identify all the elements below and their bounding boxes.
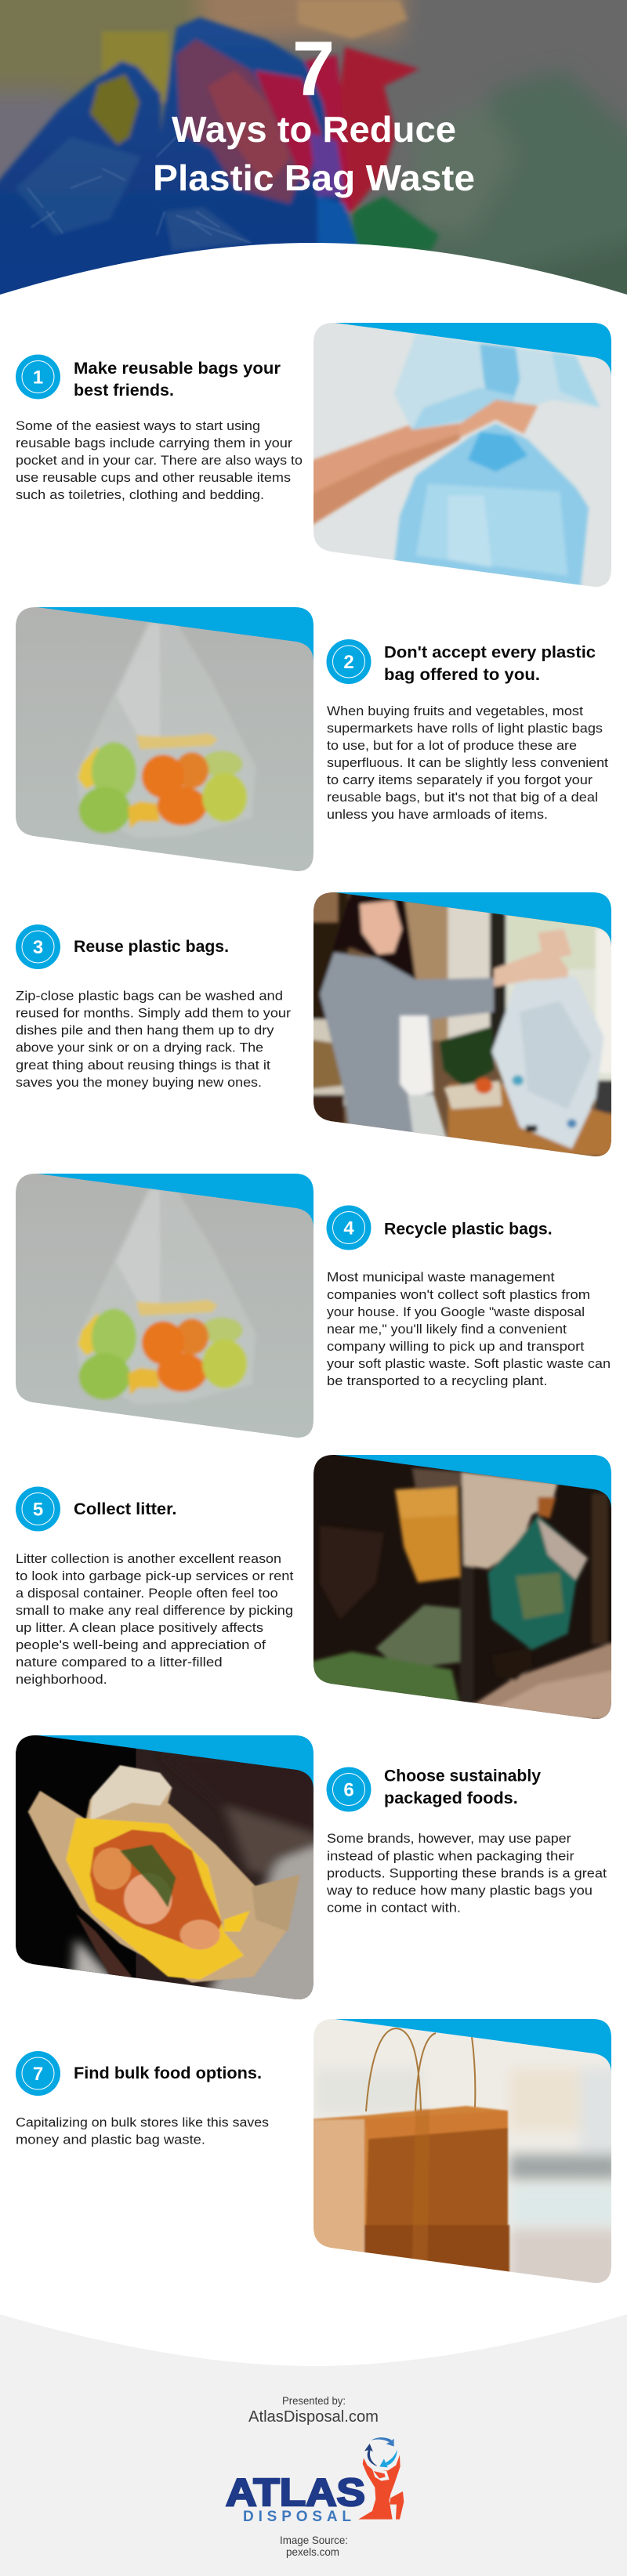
- image source: [280, 2534, 348, 2558]
- number badge 3: [16, 924, 60, 969]
- body text 5: [16, 1551, 294, 1687]
- blue corner accent: [334, 892, 611, 955]
- body text 5: people's well-being and appreciation of: [16, 1637, 266, 1652]
- body text 1: pocket and in your car. There are also ways to: [16, 453, 303, 468]
- bag folds: [27, 133, 251, 243]
- number badge 7: [16, 2051, 60, 2096]
- heading 6: [384, 1767, 541, 1807]
- wordmark: ATLAS: [226, 2472, 365, 2514]
- photo: fruit in clear bag: [16, 1174, 314, 1440]
- body text 2: to use, but for a lot of produce these are: [327, 738, 577, 753]
- body text 4: company willing to pick up and transport: [327, 1339, 585, 1354]
- blue corner accent: [36, 607, 314, 670]
- photo: hand holding blue bag: [308, 323, 611, 595]
- number badge 1: 1: [33, 367, 43, 389]
- heading 7: Find bulk food options.: [74, 2064, 262, 2082]
- body text 2: supermarkets have rolls of light plastic bags: [327, 721, 603, 736]
- heading 1: Make reusable bags your: [74, 360, 281, 378]
- body text 6: Some brands, however, may use paper: [327, 1831, 571, 1846]
- body text 5: nature compared to a litter-filled: [16, 1655, 223, 1670]
- heading 4: Recycle plastic bags.: [384, 1221, 553, 1239]
- blue corner accent: [334, 1455, 611, 1518]
- body text 6: come in contact with.: [327, 1900, 461, 1915]
- title: Plastic Bag Waste: [153, 157, 475, 198]
- body text 4: companies won't collect soft plastics from: [327, 1287, 590, 1302]
- body text 1: reusable bags include carrying them in your: [16, 436, 292, 450]
- body text 5: up litter. A clean place positively affects: [16, 1620, 263, 1635]
- section 7: [16, 2019, 619, 2292]
- heading 6: packaged foods.: [384, 1789, 518, 1807]
- body text 6: instead of plastic when packaging their: [327, 1849, 574, 1863]
- number badge 4: [326, 1205, 371, 1250]
- heading 6: Choose sustainably: [384, 1767, 541, 1785]
- number badge 7: 7: [33, 2064, 43, 2085]
- photo: fries and shrimp in paper: [12, 1734, 328, 2010]
- number badge 2: [326, 639, 371, 684]
- body text 5: to look into garbage pick-up services or rent: [16, 1568, 294, 1583]
- body text 4: your house. If you Google "waste disposal: [327, 1304, 585, 1319]
- header photo: plastic bags: [0, 0, 627, 295]
- section 3: [16, 886, 618, 1159]
- blue corner accent: [36, 1174, 314, 1236]
- body text 3: dishes pile and then hang them up to dry: [16, 1023, 274, 1038]
- header banner: [0, 0, 627, 295]
- blue corner accent: [334, 2019, 611, 2082]
- body text 3: great thing about reusing things is that it: [16, 1058, 270, 1073]
- body text 1: [16, 418, 303, 502]
- body text 3: [16, 989, 291, 1090]
- body text 6: products. Supporting these brands is a great: [327, 1866, 607, 1881]
- title: Ways to Reduce: [172, 109, 456, 150]
- heading 1: [74, 360, 281, 400]
- section 4: [16, 1174, 611, 1440]
- body text 4: Most municipal waste management: [327, 1270, 555, 1285]
- body text 5: Litter collection is another excellent reason: [16, 1551, 281, 1566]
- section 1: [16, 323, 611, 595]
- body text 2: superfluous. It can be slightly less convenient: [327, 755, 608, 770]
- body text 6: way to reduce how many plastic bags you: [326, 1883, 593, 1898]
- body text 5: small to make any real difference by picking: [16, 1603, 293, 1618]
- body text 3: saves you the money buying new ones.: [16, 1075, 262, 1090]
- body text 6: [326, 1831, 607, 1915]
- body text 4: your soft plastic waste. Soft plastic waste can: [327, 1356, 611, 1371]
- body text 7: [16, 2115, 269, 2147]
- sub wordmark: DISPOSAL: [243, 2509, 351, 2525]
- blue corner accent: [36, 1735, 314, 1798]
- number badge 5: 5: [33, 1500, 43, 1520]
- heading 5: Collect litter.: [74, 1500, 177, 1518]
- heading 2: Don't accept every plastic: [384, 644, 596, 661]
- body text 1: use reusable cups and other reusable items: [16, 470, 291, 485]
- website: AtlasDisposal.com: [248, 2408, 379, 2426]
- photo: person collecting litter: [308, 1455, 618, 1721]
- heading 2: bag offered to you.: [384, 666, 540, 684]
- body text 2: to carry items separately if you forgot your: [327, 772, 593, 787]
- number badge 4: 4: [343, 1217, 354, 1239]
- body text 1: such as toiletries, clothing and bedding.: [16, 487, 264, 502]
- heading 2: [384, 644, 596, 684]
- body text 3: reused for months. Simply add them to your: [16, 1006, 291, 1021]
- footer: [0, 2314, 627, 2576]
- photo: fruit in clear bag: [16, 607, 314, 874]
- number badge 2: 2: [343, 652, 354, 673]
- body text 5: neighborhood.: [16, 1672, 107, 1687]
- number badge 1: [16, 354, 60, 400]
- body text 5: a disposal container. People often feel too: [16, 1586, 278, 1601]
- image source: pexels.com: [286, 2545, 339, 2558]
- header white wave: [0, 243, 627, 313]
- number badge 5: [16, 1487, 60, 1531]
- number badge 6: 6: [343, 1780, 354, 1800]
- heading 3: Reuse plastic bags.: [74, 938, 229, 956]
- presented by: Presented by:: [282, 2394, 346, 2407]
- body text 4: be transported to a recycling plant.: [327, 1373, 547, 1388]
- number badge 3: 3: [33, 937, 43, 958]
- blue corner accent: [334, 323, 611, 385]
- photo: woman inspecting plastic bottles in a bag: [308, 886, 618, 1159]
- heading 1: best friends.: [74, 382, 174, 400]
- body text 4: near me," you'll likely find a convenient: [327, 1322, 567, 1337]
- body text 3: Zip-close plastic bags can be washed and: [16, 989, 283, 1004]
- body text 2: reusable bags, but it's not that big of a deal: [327, 790, 598, 805]
- section 2: [16, 607, 608, 874]
- section 6: [12, 1734, 607, 2010]
- body text 3: above your sink or on a drying rack. The: [16, 1040, 263, 1055]
- footer grey panel: [0, 2314, 627, 2576]
- atlas figure with recycling arrows: [358, 2437, 404, 2520]
- number badge 6: [326, 1767, 371, 1811]
- body text 1: Some of the easiest ways to start using: [16, 418, 260, 433]
- Atlas Disposal logo: [226, 2437, 404, 2525]
- title: 7: [292, 25, 335, 111]
- image source: Image Source:: [280, 2534, 348, 2546]
- body text 7: Capitalizing on bulk stores like this saves: [16, 2115, 269, 2129]
- body text 2: [327, 704, 608, 822]
- body text 2: When buying fruits and vegetables, most: [327, 704, 583, 718]
- body text 7: money and plastic bag waste.: [16, 2133, 205, 2147]
- title: [153, 25, 475, 198]
- bag handles: [366, 2028, 475, 2111]
- body text 4: [327, 1270, 611, 1388]
- body text 2: unless you have armloads of items.: [327, 807, 548, 822]
- section 5: [16, 1455, 618, 1721]
- photo: brown paper bag: [310, 2019, 619, 2292]
